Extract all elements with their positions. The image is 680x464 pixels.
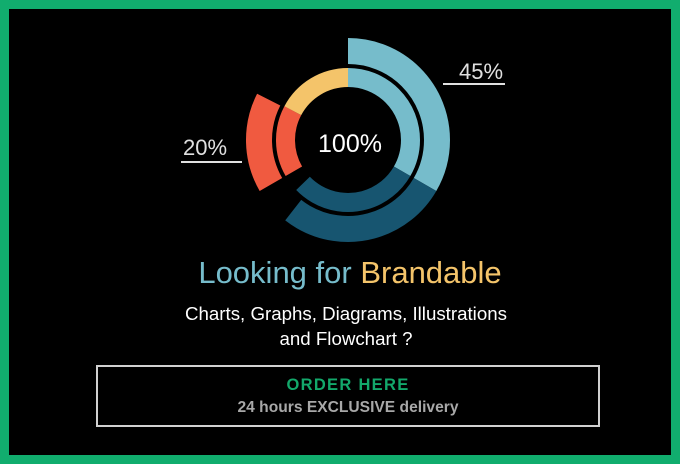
label 45%: 45% [459, 59, 503, 84]
subtitle: and Flowchart ? [280, 328, 412, 349]
subtitle: Charts, Graphs, Diagrams, Illustrations [185, 303, 507, 324]
center label: 100% [318, 130, 382, 158]
headline: Looking for Brandable [198, 255, 502, 290]
order heading: ORDER HERE [286, 376, 410, 394]
inner ring segments [263, 55, 433, 225]
subtitle [185, 303, 507, 349]
label 20% [181, 135, 242, 162]
delivery text: 24 hours EXCLUSIVE delivery [238, 399, 458, 416]
label 20%: 20% [183, 135, 227, 160]
order box [96, 365, 600, 427]
outer ring segments [226, 18, 470, 262]
